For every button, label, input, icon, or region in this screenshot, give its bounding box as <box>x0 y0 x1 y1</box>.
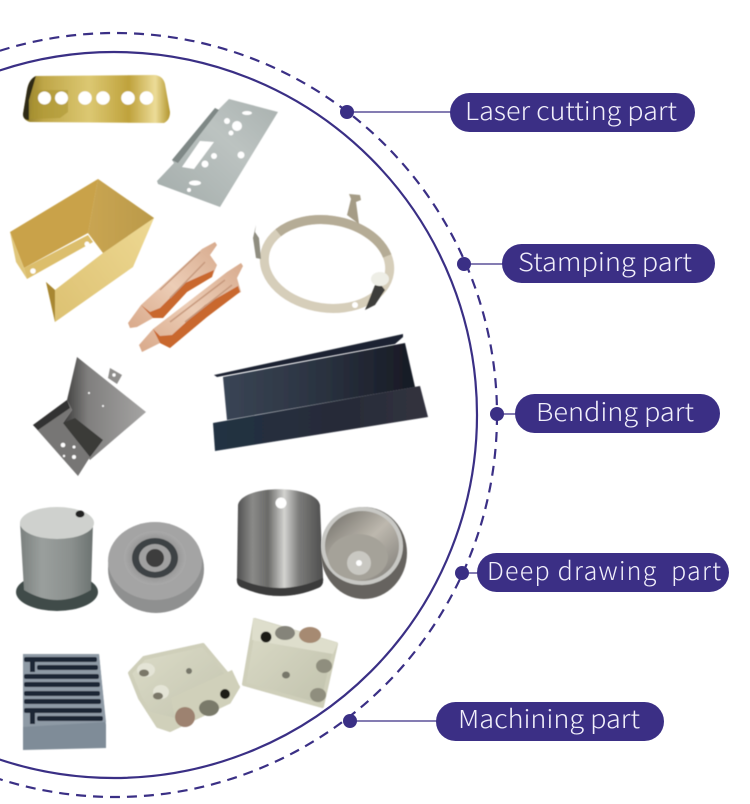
callout: stamping part <box>457 243 715 283</box>
part: drawn cylinder with hole <box>237 489 323 596</box>
callout: stamping part: Stamping part <box>518 243 692 279</box>
callout: machining part <box>343 700 664 741</box>
callout: machining part: Machining part <box>458 700 640 736</box>
callout: laser cutting part <box>340 92 695 132</box>
callout: bending part: Bending part <box>536 393 694 429</box>
part: copper stamped contacts <box>128 242 243 352</box>
inner solid circle <box>0 52 477 778</box>
part: machined aluminium block, right <box>244 618 338 706</box>
part: machined aluminium block, left <box>130 645 240 732</box>
part: gold bent box <box>10 179 154 322</box>
part: gold laser-cut plate <box>23 75 170 123</box>
outer dashed circle <box>0 33 497 797</box>
part: deep drawn pulley <box>108 522 204 613</box>
part: drawn steel can <box>16 507 98 611</box>
part: steel laser-cut panel <box>157 99 278 207</box>
callout: deep drawing part: Deep drawing part <box>487 552 721 588</box>
part: dark bent channel <box>213 334 428 451</box>
part: slotted machined block <box>23 654 106 750</box>
callout: laser cutting part: Laser cutting part <box>465 92 677 128</box>
part: drawn cup <box>321 507 407 599</box>
callout: bending part <box>490 393 720 433</box>
part: gray bent bracket <box>33 357 146 476</box>
part: stamped metal ring <box>253 194 396 316</box>
